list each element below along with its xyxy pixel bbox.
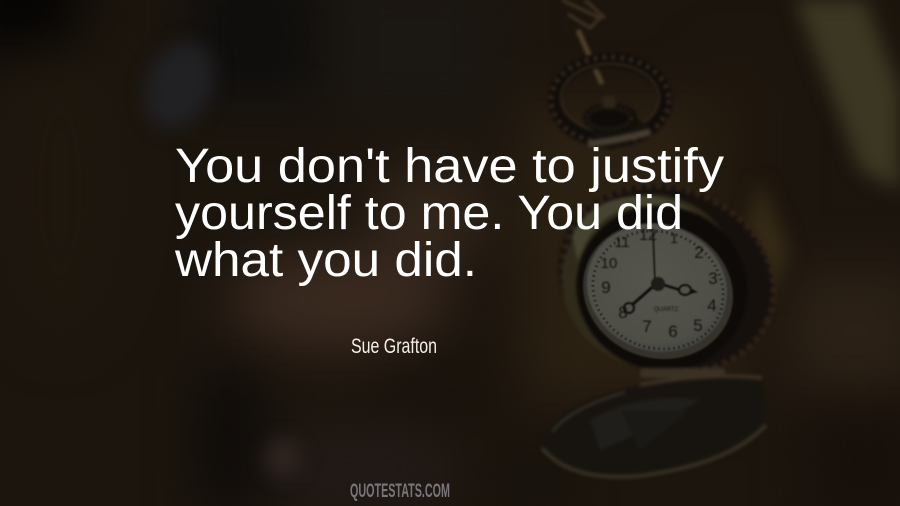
quote line 2: yourself to me. You did (175, 187, 683, 240)
dial numerals: 1 (670, 230, 678, 246)
watch bow ring (551, 57, 669, 150)
dial numerals (601, 227, 718, 341)
author name: Sue Grafton (351, 335, 437, 358)
watch case (530, 152, 802, 406)
dial numerals: 2 (694, 243, 704, 262)
dial numerals: 9 (601, 278, 611, 297)
dial numerals: 4 (707, 296, 717, 315)
clock hands (624, 232, 698, 313)
watch chain (562, 0, 605, 84)
dial numerals: 5 (693, 316, 703, 335)
dial numerals: 3 (708, 269, 718, 288)
watch dial (564, 202, 752, 380)
watch open lid (540, 368, 766, 477)
dial numerals: 7 (642, 317, 652, 336)
dial numerals: 10 (601, 255, 617, 272)
dial numerals: 8 (618, 303, 628, 322)
dial numerals: 6 (668, 322, 678, 341)
dial numerals: 12 (639, 227, 657, 244)
watermark: QUOTESTATS.COM (350, 481, 450, 502)
dial numerals: QUARTZ (654, 307, 679, 313)
quote line 3: what you did. (174, 234, 477, 287)
icon: pocket watch (530, 0, 802, 477)
quote line 1: You don't have to justify (175, 140, 724, 193)
grey blur blob (132, 31, 228, 139)
quote text (174, 140, 724, 287)
dial numerals: 11 (614, 234, 630, 251)
